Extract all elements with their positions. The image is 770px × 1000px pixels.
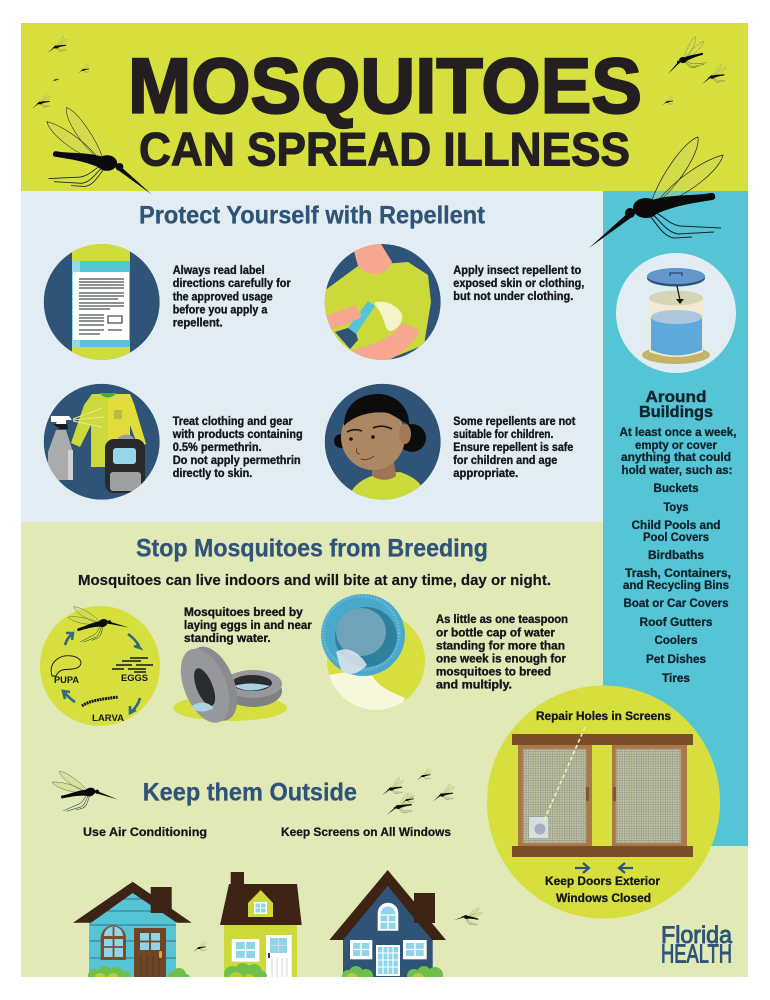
text: around buildings list: Around	[646, 389, 706, 406]
icon: covered water container	[616, 253, 736, 373]
text: use air conditioning: Use Air Conditioning	[83, 825, 207, 839]
text: read label: the approved usage	[173, 292, 273, 304]
text: indoors note: Mosquitoes can live indoors and will bite at any time, day or night.	[78, 572, 551, 589]
icon: pupa	[51, 656, 81, 676]
text: around buildings list: Child Pools and	[632, 518, 720, 532]
icon: mosquito beside heading	[49, 756, 118, 819]
logo: Florida Health: HEALTH	[661, 938, 732, 968]
text: around buildings list: anything that could	[621, 450, 731, 464]
text: breed in standing water: Mosquitoes breed by	[184, 607, 303, 619]
icon: blue siding house	[73, 882, 192, 985]
icon: large mosquito header left	[47, 108, 151, 194]
text: around buildings list: Birdbaths	[648, 548, 704, 562]
text: around buildings list: Toys	[664, 500, 689, 514]
icon: yellow house	[220, 872, 302, 986]
text: children caution	[453, 416, 575, 480]
text: teaspoon of water: or bottle cap of water	[436, 628, 556, 640]
heading: protect yourself: Protect Yourself with Repellent	[139, 202, 486, 230]
text: teaspoon of water: As little as one teaspoon	[436, 614, 568, 626]
text: read label: directions carefully for	[173, 278, 291, 290]
icon: arm being sprayed	[320, 244, 441, 366]
text: read label: before you apply a	[173, 304, 268, 316]
icon: small mosquitoes near houses	[193, 901, 483, 952]
text: treat clothing: Treat clothing and gear	[173, 416, 293, 428]
logo: Florida Health	[661, 922, 733, 968]
icon: larva	[82, 697, 118, 706]
text: keep doors closed	[545, 874, 660, 905]
text: breed in standing water: standing water.	[184, 633, 271, 645]
icon: spray, jacket and backpack	[44, 384, 160, 500]
text: teaspoon of water: mosquitoes to breed	[436, 666, 551, 678]
text: apply repellent: Apply insect repellent to	[453, 265, 581, 277]
text: breed in standing water: laying eggs in and near	[184, 620, 312, 632]
text: treat clothing: directly to skin.	[173, 468, 252, 480]
text: keep screens: Keep Screens on All Windows	[281, 825, 451, 839]
text: children caution: Some repellents are not	[453, 416, 575, 428]
icon: window frames	[512, 727, 693, 857]
text: children caution: for children and age	[453, 455, 557, 467]
text: teaspoon of water: and multiply.	[436, 680, 512, 692]
icon: navy house	[329, 870, 446, 985]
text: eggs label: EGGS	[121, 673, 148, 684]
title: MOSQUITOES	[128, 42, 642, 130]
chart: mosquito life cycle	[40, 589, 160, 726]
icon: eggs	[112, 658, 153, 672]
text: teaspoon of water: one week is enough for	[436, 654, 567, 666]
icon: mosquito swarm	[382, 768, 454, 815]
text: around buildings list: Boat or Car Covers	[624, 596, 729, 610]
icon: repair screens circle	[487, 686, 720, 918]
text: keep doors closed: Windows Closed	[556, 891, 651, 905]
text: around buildings list: At least once a week,	[620, 425, 736, 439]
text: pupa label: PUPA	[54, 675, 79, 686]
icon: adult mosquito	[65, 589, 129, 649]
text: around buildings list: empty or cover	[635, 438, 717, 452]
logo: Florida Health: Florida	[661, 922, 733, 949]
text: read label	[173, 265, 291, 330]
text: repair holes: Repair Holes in Screens	[536, 711, 671, 723]
heading: stop mosquitoes: Stop Mosquitoes from Breeding	[136, 534, 488, 562]
text: read label: repellent.	[173, 318, 223, 330]
text: around buildings list	[620, 389, 736, 685]
text: apply repellent: but not under clothing.	[453, 291, 573, 303]
panel: around buildings sidebar	[603, 191, 748, 846]
text: around buildings list: Buildings	[639, 404, 713, 421]
text: around buildings list: hold water, such as:	[622, 463, 732, 477]
heading: keep them outside: Keep them Outside	[143, 778, 357, 806]
panel: lower section background	[21, 522, 748, 977]
text: around buildings list: Buckets	[654, 481, 699, 495]
text: around buildings list: Roof Gutters	[640, 615, 713, 629]
text: larva label: LARVA	[92, 713, 124, 724]
text: around buildings list: Coolers	[654, 633, 698, 647]
title: CAN SPREAD ILLNESS	[139, 122, 630, 176]
text: breed in standing water	[184, 607, 312, 645]
icon: small mosquitoes in header	[32, 36, 726, 109]
text: apply repellent: exposed skin or clothing,	[453, 278, 584, 290]
text: children caution: appropriate.	[453, 468, 518, 480]
title	[128, 42, 642, 176]
text: treat clothing: with products containing	[172, 429, 303, 441]
text: around buildings list: Pet Dishes	[646, 652, 706, 666]
icon: cycle arrows	[63, 633, 140, 713]
icon: repellent bottle label	[44, 244, 160, 360]
text: treat clothing	[172, 416, 303, 480]
text: around buildings list: Trash, Containers,	[625, 566, 731, 580]
text: around buildings list: Tires	[662, 671, 690, 685]
text: teaspoon of water	[436, 614, 568, 692]
icon: large mosquito header right	[589, 137, 723, 248]
text: apply repellent	[453, 265, 584, 303]
text: treat clothing: Do not apply permethrin	[173, 455, 301, 467]
text: children caution: Ensure repellent is safe	[453, 442, 573, 454]
text: keep doors closed: Keep Doors Exterior	[545, 874, 660, 888]
text: treat clothing: 0.5% permethrin.	[173, 442, 262, 454]
panel: header	[21, 23, 748, 191]
icon: child portrait	[325, 384, 441, 500]
icon: tires with water	[171, 639, 287, 731]
text: children caution: suitable for children.	[453, 429, 553, 441]
text: read label: Always read label	[173, 265, 265, 277]
text: around buildings list: Pool Covers	[643, 530, 709, 544]
text: around buildings list: and Recycling Bins	[623, 578, 729, 592]
icon: bottle cap with water	[321, 594, 425, 720]
panel: repellent section background	[21, 191, 603, 522]
text: teaspoon of water: standing for more than	[436, 640, 565, 652]
icon: closing arrows	[575, 863, 633, 873]
